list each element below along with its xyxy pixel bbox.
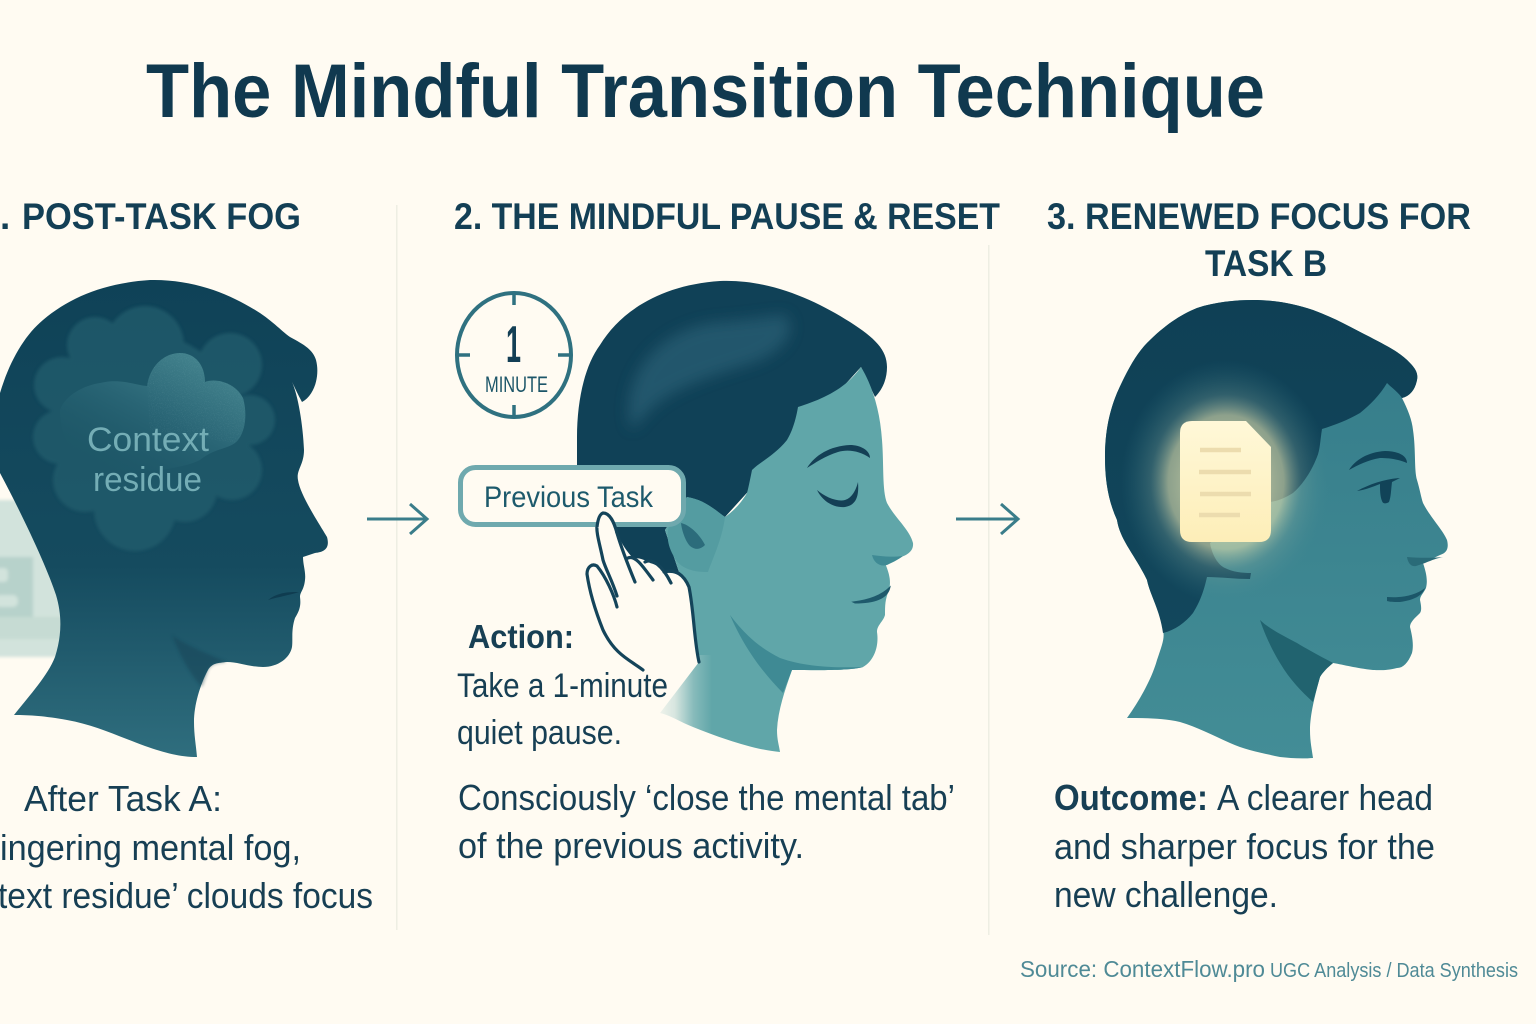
heading: step 1: .: [0, 196, 10, 237]
head: face and neck: [1105, 300, 1448, 758]
hair: [1105, 300, 1417, 633]
mouth line: [268, 592, 299, 600]
heading: step 3: [1047, 196, 1471, 284]
head: face: [660, 367, 913, 752]
eyebrow: [1349, 451, 1407, 470]
head: hair: [577, 281, 887, 595]
text block: action: [457, 618, 668, 752]
nose shadow: [1407, 557, 1443, 566]
panel: step 2 mindful pause: [454, 196, 1000, 866]
text block: close the mental tab: Consciously ‘close the mental tab’: [458, 777, 955, 818]
panel: step 3 renewed focus: [1047, 196, 1471, 915]
icon: glowing document: [1180, 421, 1271, 542]
heading: step 3: TASK B: [1205, 243, 1327, 284]
neck shadow: [172, 635, 227, 687]
ear: [668, 497, 725, 572]
glow around document: [1121, 360, 1331, 604]
closed eye: [817, 482, 858, 507]
head silhouette: [0, 280, 328, 757]
heading: step 2: 2. THE MINDFUL PAUSE & RESET: [454, 196, 1000, 237]
label: context residue: Context: [87, 421, 210, 459]
title: The Mindful Transition Technique: [146, 49, 1265, 134]
source note: Source: ContextFlow.pro: [1020, 956, 1265, 982]
text block: outcome: and sharper focus for the: [1054, 826, 1435, 867]
arrow: step 1 to step 2: [367, 504, 427, 534]
text block: after task A: After Task A:: [24, 778, 222, 819]
label: context residue: [87, 421, 210, 499]
fog cloud: [33, 306, 275, 551]
text block: close the mental tab: of the previous activity.: [458, 825, 804, 866]
mouth: [853, 587, 890, 603]
text block: outcome: Outcome:: [1054, 777, 1208, 818]
text block: after task A: [0, 778, 373, 916]
heading: step 3: 3. RENEWED FOCUS FOR: [1047, 196, 1471, 237]
text block: outcome: new challenge.: [1054, 874, 1278, 915]
text block: action: Take a 1-minute: [457, 667, 668, 705]
nose shadow: [872, 555, 903, 566]
label: context residue: residue: [93, 461, 202, 499]
text block: action: quiet pause.: [457, 714, 622, 752]
jaw and neck shadow: [730, 615, 863, 693]
clock: one minute: [457, 293, 571, 417]
source note: [1020, 956, 1518, 982]
clock: one minute: MINUTE: [485, 372, 548, 397]
clock: one minute: 1: [506, 316, 521, 374]
text block: close the mental tab: [458, 777, 955, 866]
neck shadow: [1260, 620, 1333, 702]
text block: after task A: text residue’ clouds focus: [0, 875, 373, 916]
neck fade: [650, 655, 712, 735]
text block: outcome: A clearer head: [1217, 777, 1433, 818]
arrow: step 2 to step 3: [956, 504, 1018, 534]
text block: outcome: [1054, 777, 1435, 915]
button: previous task: [460, 468, 684, 524]
finger tip over button: [597, 513, 617, 533]
heading: step 1: POST-TASK FOG: [22, 196, 301, 237]
hand with pointing finger: [587, 513, 699, 713]
eye: [1357, 478, 1400, 503]
text block: action: Action:: [468, 618, 574, 655]
text block: after task A: ingering mental fog,: [0, 827, 301, 868]
faded screen behind head: [0, 500, 70, 657]
mouth: [1387, 588, 1425, 602]
eyebrow: [807, 445, 870, 468]
button: previous task: Previous Task: [484, 481, 654, 514]
panel: step 1 post-task fog: [0, 196, 373, 916]
hair highlight: [629, 315, 790, 430]
